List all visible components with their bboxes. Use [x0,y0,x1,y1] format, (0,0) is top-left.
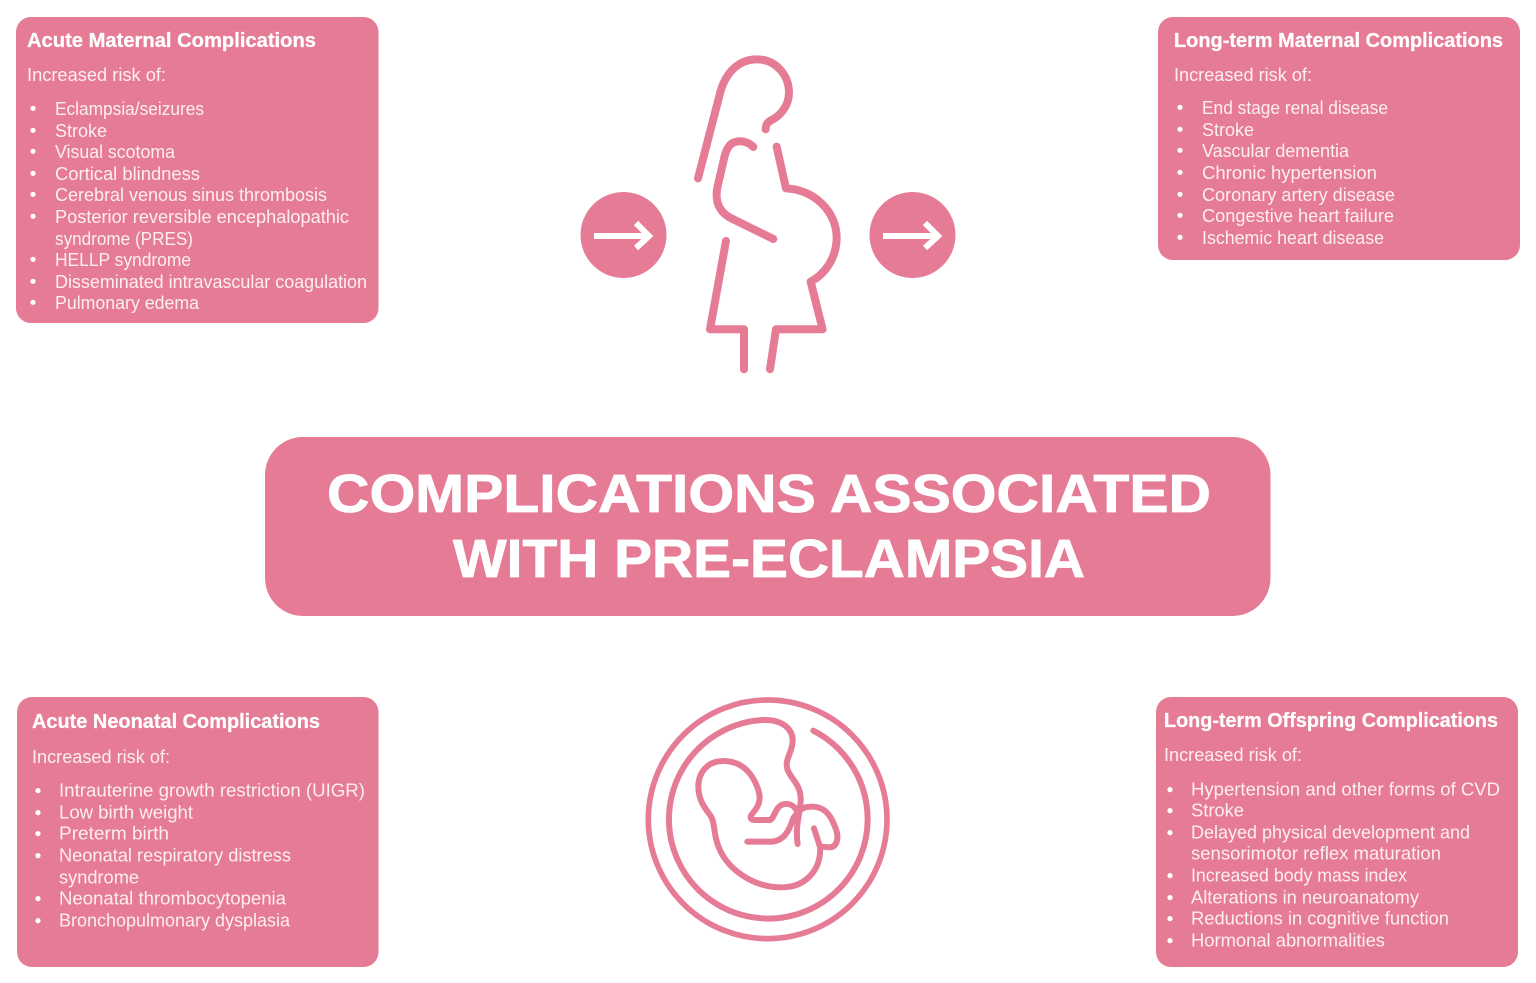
bullet list: acute maternal: Eclampsia/seizures [55,99,204,119]
bullet list: acute maternal: Disseminated intravascular coagulation [55,272,367,292]
bullet list: acute neonatal: Preterm birth [59,824,169,844]
title: line one: COMPLICATIONS ASSOCIATED [327,464,1211,524]
bullet list: long-term maternal: Congestive heart failure [1202,206,1394,226]
bullet list: acute maternal: Stroke [55,121,107,141]
bullet list: acute maternal: Visual scotoma [55,142,176,162]
text: increased risk of: Increased risk of: [27,65,166,85]
bullet list: long-term offspring: Reductions in cognitive function [1191,909,1449,929]
icon: right arrow circle [870,192,956,278]
bullet list: long-term maternal [1177,98,1395,248]
bullet list: long-term offspring: sensorimotor reflex maturation [1191,844,1441,864]
bullet list: acute neonatal: Bronchopulmonary dysplasia [59,911,291,931]
bullet list: acute neonatal: Neonatal thrombocytopenia [59,889,287,909]
panel: long-term offspring complications [1156,697,1518,967]
panel: long-term maternal complications [1158,17,1520,260]
icon: left arrow circle [580,192,666,278]
bullet list: acute neonatal: syndrome [59,868,139,888]
heading: acute neonatal complications: Acute Neonatal Complications [32,711,320,733]
bullet list: acute maternal [30,99,367,313]
bullet list: acute maternal: HELLP syndrome [55,250,191,270]
bullet list: acute maternal: Pulmonary edema [55,293,200,313]
bullet list: acute neonatal [35,781,365,931]
bullet list: long-term offspring: Increased body mass index [1191,866,1407,886]
bullet list: long-term maternal: Stroke [1202,120,1254,140]
title banner [265,437,1270,616]
bullet list: long-term maternal: Coronary artery disease [1202,185,1395,205]
bullet list: acute maternal: Posterior reversible encephalopathic [55,207,349,227]
heading: acute maternal complications: Acute Maternal Complications [27,30,316,52]
title: line two: WITH PRE-ECLAMPSIA [453,529,1085,589]
text: increased risk of: Increased risk of: [1164,745,1302,765]
bullet list: long-term offspring: Delayed physical development and [1191,823,1470,843]
bullet list: long-term offspring: Hypertension and other forms of CVD [1191,780,1500,800]
bullet list: long-term maternal: Chronic hypertension [1202,163,1377,183]
bullet list: acute maternal: syndrome (PRES) [55,229,193,249]
panel: acute maternal complications [16,17,378,323]
heading: long-term offspring complications: Long-term Offspring Complications [1164,710,1498,732]
heading: long-term maternal complications: Long-term Maternal Complications [1174,30,1503,52]
bullet list: long-term offspring [1167,780,1500,951]
icon: pregnant woman [698,59,837,369]
bullet list: long-term maternal: Vascular dementia [1202,141,1350,161]
bullet list: long-term offspring: Hormonal abnormalities [1191,931,1385,951]
bullet list: long-term offspring: Alterations in neuroanatomy [1191,888,1419,908]
text: increased risk of: Increased risk of: [1174,65,1312,85]
bullet list: long-term maternal: End stage renal disease [1202,98,1388,118]
bullet list: long-term maternal: Ischemic heart disease [1202,228,1384,248]
bullet list: acute maternal: Cortical blindness [55,164,200,184]
text: increased risk of: Increased risk of: [32,747,170,767]
bullet list: acute neonatal: Low birth weight [59,803,193,823]
icon: fetus in circle [648,700,887,939]
bullet list: acute maternal: Cerebral venous sinus thrombosis [55,185,327,205]
bullet list: long-term offspring: Stroke [1191,801,1244,821]
bullet list: acute neonatal: Intrauterine growth restriction (UIGR) [59,781,365,801]
panel: acute neonatal complications [17,697,378,967]
bullet list: acute neonatal: Neonatal respiratory distress [59,846,291,866]
